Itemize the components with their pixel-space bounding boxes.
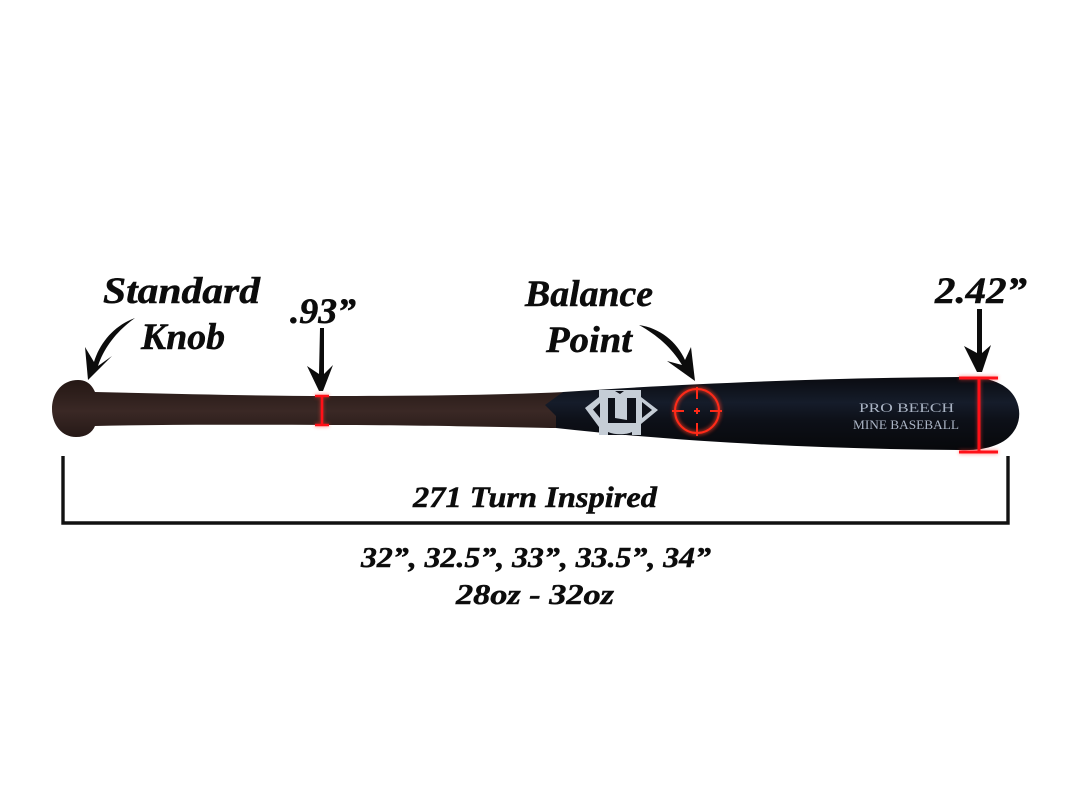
marker: balance point target xyxy=(672,387,722,436)
bat barrel xyxy=(545,377,1019,450)
bracket: bat length xyxy=(63,456,1008,523)
label: Standard Knob: Standard xyxy=(103,271,261,312)
arrow: to handle xyxy=(307,328,333,391)
baseball bat xyxy=(52,377,1019,450)
label: lengths: 32”, 32.5”, 33”, 33.5”, 34” xyxy=(360,543,711,574)
arrow: to balance point xyxy=(639,325,695,381)
bat handle and knob xyxy=(52,380,565,437)
marker: handle diameter xyxy=(315,396,329,425)
label: Balance Point: Balance xyxy=(524,274,653,315)
arrow: to knob xyxy=(85,318,135,380)
label: barrel diameter: 2.42” xyxy=(934,271,1027,312)
label: Standard Knob: Knob xyxy=(140,317,225,358)
marker: barrel diameter xyxy=(959,378,998,452)
label: Standard Knob xyxy=(103,271,261,358)
barrel text xyxy=(853,400,959,432)
barrel text: MINE BASEBALL xyxy=(853,417,959,432)
label: weights: 28oz - 32oz xyxy=(455,580,614,611)
label: Balance Point xyxy=(524,274,653,361)
label: handle diameter: .93” xyxy=(290,291,356,331)
arrow: to barrel xyxy=(964,309,991,372)
logo xyxy=(585,390,658,435)
barrel text: PRO BEECH xyxy=(859,400,954,415)
label: 271 Turn Inspired: 271 Turn Inspired xyxy=(412,481,658,514)
label: Balance Point: Point xyxy=(545,320,634,361)
